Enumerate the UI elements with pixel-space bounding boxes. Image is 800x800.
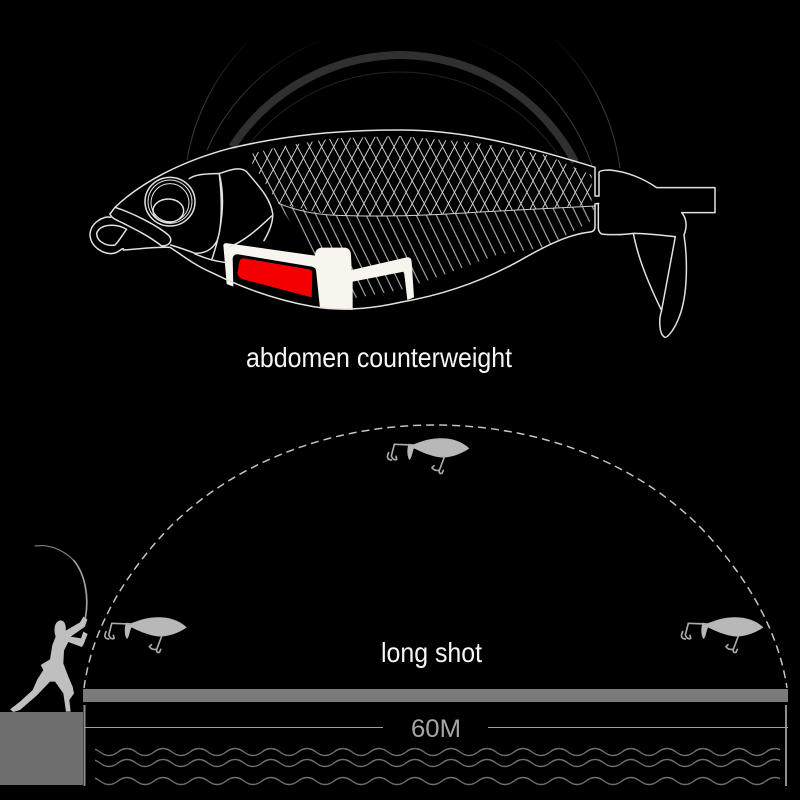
icon: lure near angler — [105, 617, 187, 653]
icon: lure at top of arc — [387, 438, 469, 474]
icon: lure at landing point — [681, 617, 763, 653]
lure body outline — [90, 130, 599, 309]
heading: abdomen counterweight: abdomen counterweight — [246, 342, 512, 373]
ground bar — [83, 689, 788, 702]
pier block — [0, 712, 83, 785]
sound wave arcs above the lure — [187, 0, 620, 168]
crosshatch scales — [247, 136, 595, 298]
dashed cast trajectory — [84, 425, 787, 688]
upper jaw — [110, 207, 171, 246]
gill cover — [171, 169, 273, 263]
mouth ring — [90, 217, 127, 254]
abdomen counterweight frame — [223, 243, 414, 310]
tail joint and fin — [598, 170, 715, 337]
red weight — [237, 258, 312, 297]
lure cutaway diagram — [90, 130, 715, 337]
water waves — [82, 748, 784, 784]
heading: long shot: long shot — [381, 637, 482, 668]
eye — [145, 177, 195, 226]
distance scale: 60M: 60M — [411, 715, 461, 743]
icon: angler casting with rod — [10, 546, 88, 712]
